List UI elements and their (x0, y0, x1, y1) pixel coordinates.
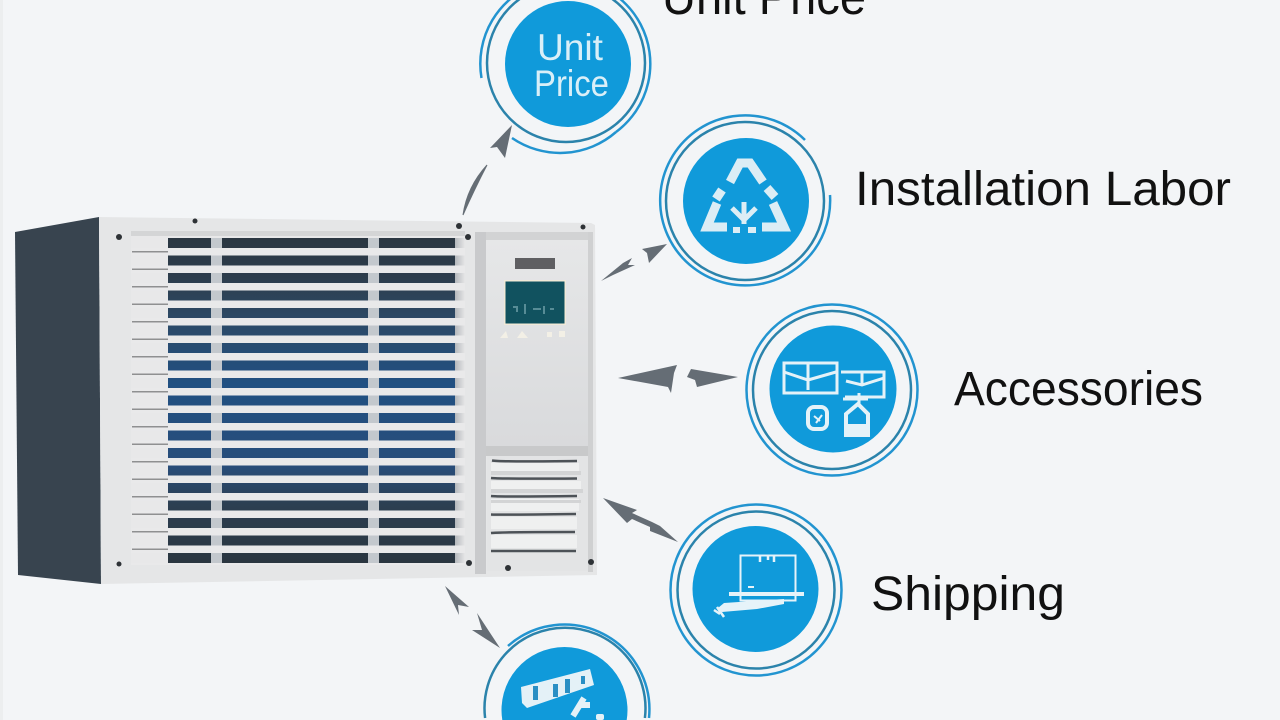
icon: recycling triangle (707, 163, 784, 230)
control buttons (500, 331, 565, 338)
icon: parcel on hand (714, 556, 804, 617)
rings (670, 504, 842, 676)
unit front casing (99, 217, 597, 584)
badge (502, 647, 628, 720)
control panel (486, 240, 588, 446)
node: unit price (480, 0, 650, 153)
badge text (534, 27, 609, 104)
label: installation labor: Installation Labor (855, 163, 1231, 216)
node: shipping (670, 504, 842, 676)
front grille (131, 231, 465, 565)
arrow: to unit price (463, 125, 512, 215)
rings (746, 304, 918, 476)
status display (515, 258, 555, 269)
badge (683, 138, 809, 264)
divider strip (475, 232, 486, 574)
label: shipping: Shipping (871, 568, 1065, 621)
badge text: Unit (537, 27, 604, 68)
rings (480, 0, 650, 153)
node: accessories (746, 304, 918, 476)
lower vent (486, 446, 588, 571)
rings (485, 625, 649, 718)
arrow: to shipping (603, 498, 678, 542)
arrow: to bottom item (445, 586, 500, 648)
rings (660, 115, 830, 285)
icon: tool (521, 669, 604, 720)
unit side panel (15, 217, 101, 584)
badge text: Price (534, 63, 609, 104)
air conditioner unit (15, 217, 597, 584)
label: accessories: Accessories (954, 363, 1203, 416)
badge (692, 526, 818, 652)
node: installation labor (660, 115, 830, 285)
icon: accessories parts (784, 363, 884, 435)
arrow: to installation labor (601, 244, 667, 281)
node: tools and extras (485, 625, 649, 720)
screen (504, 280, 566, 325)
screws (116, 218, 594, 571)
badge (505, 1, 631, 127)
arrow: to accessories (618, 365, 738, 393)
badge (770, 326, 896, 452)
